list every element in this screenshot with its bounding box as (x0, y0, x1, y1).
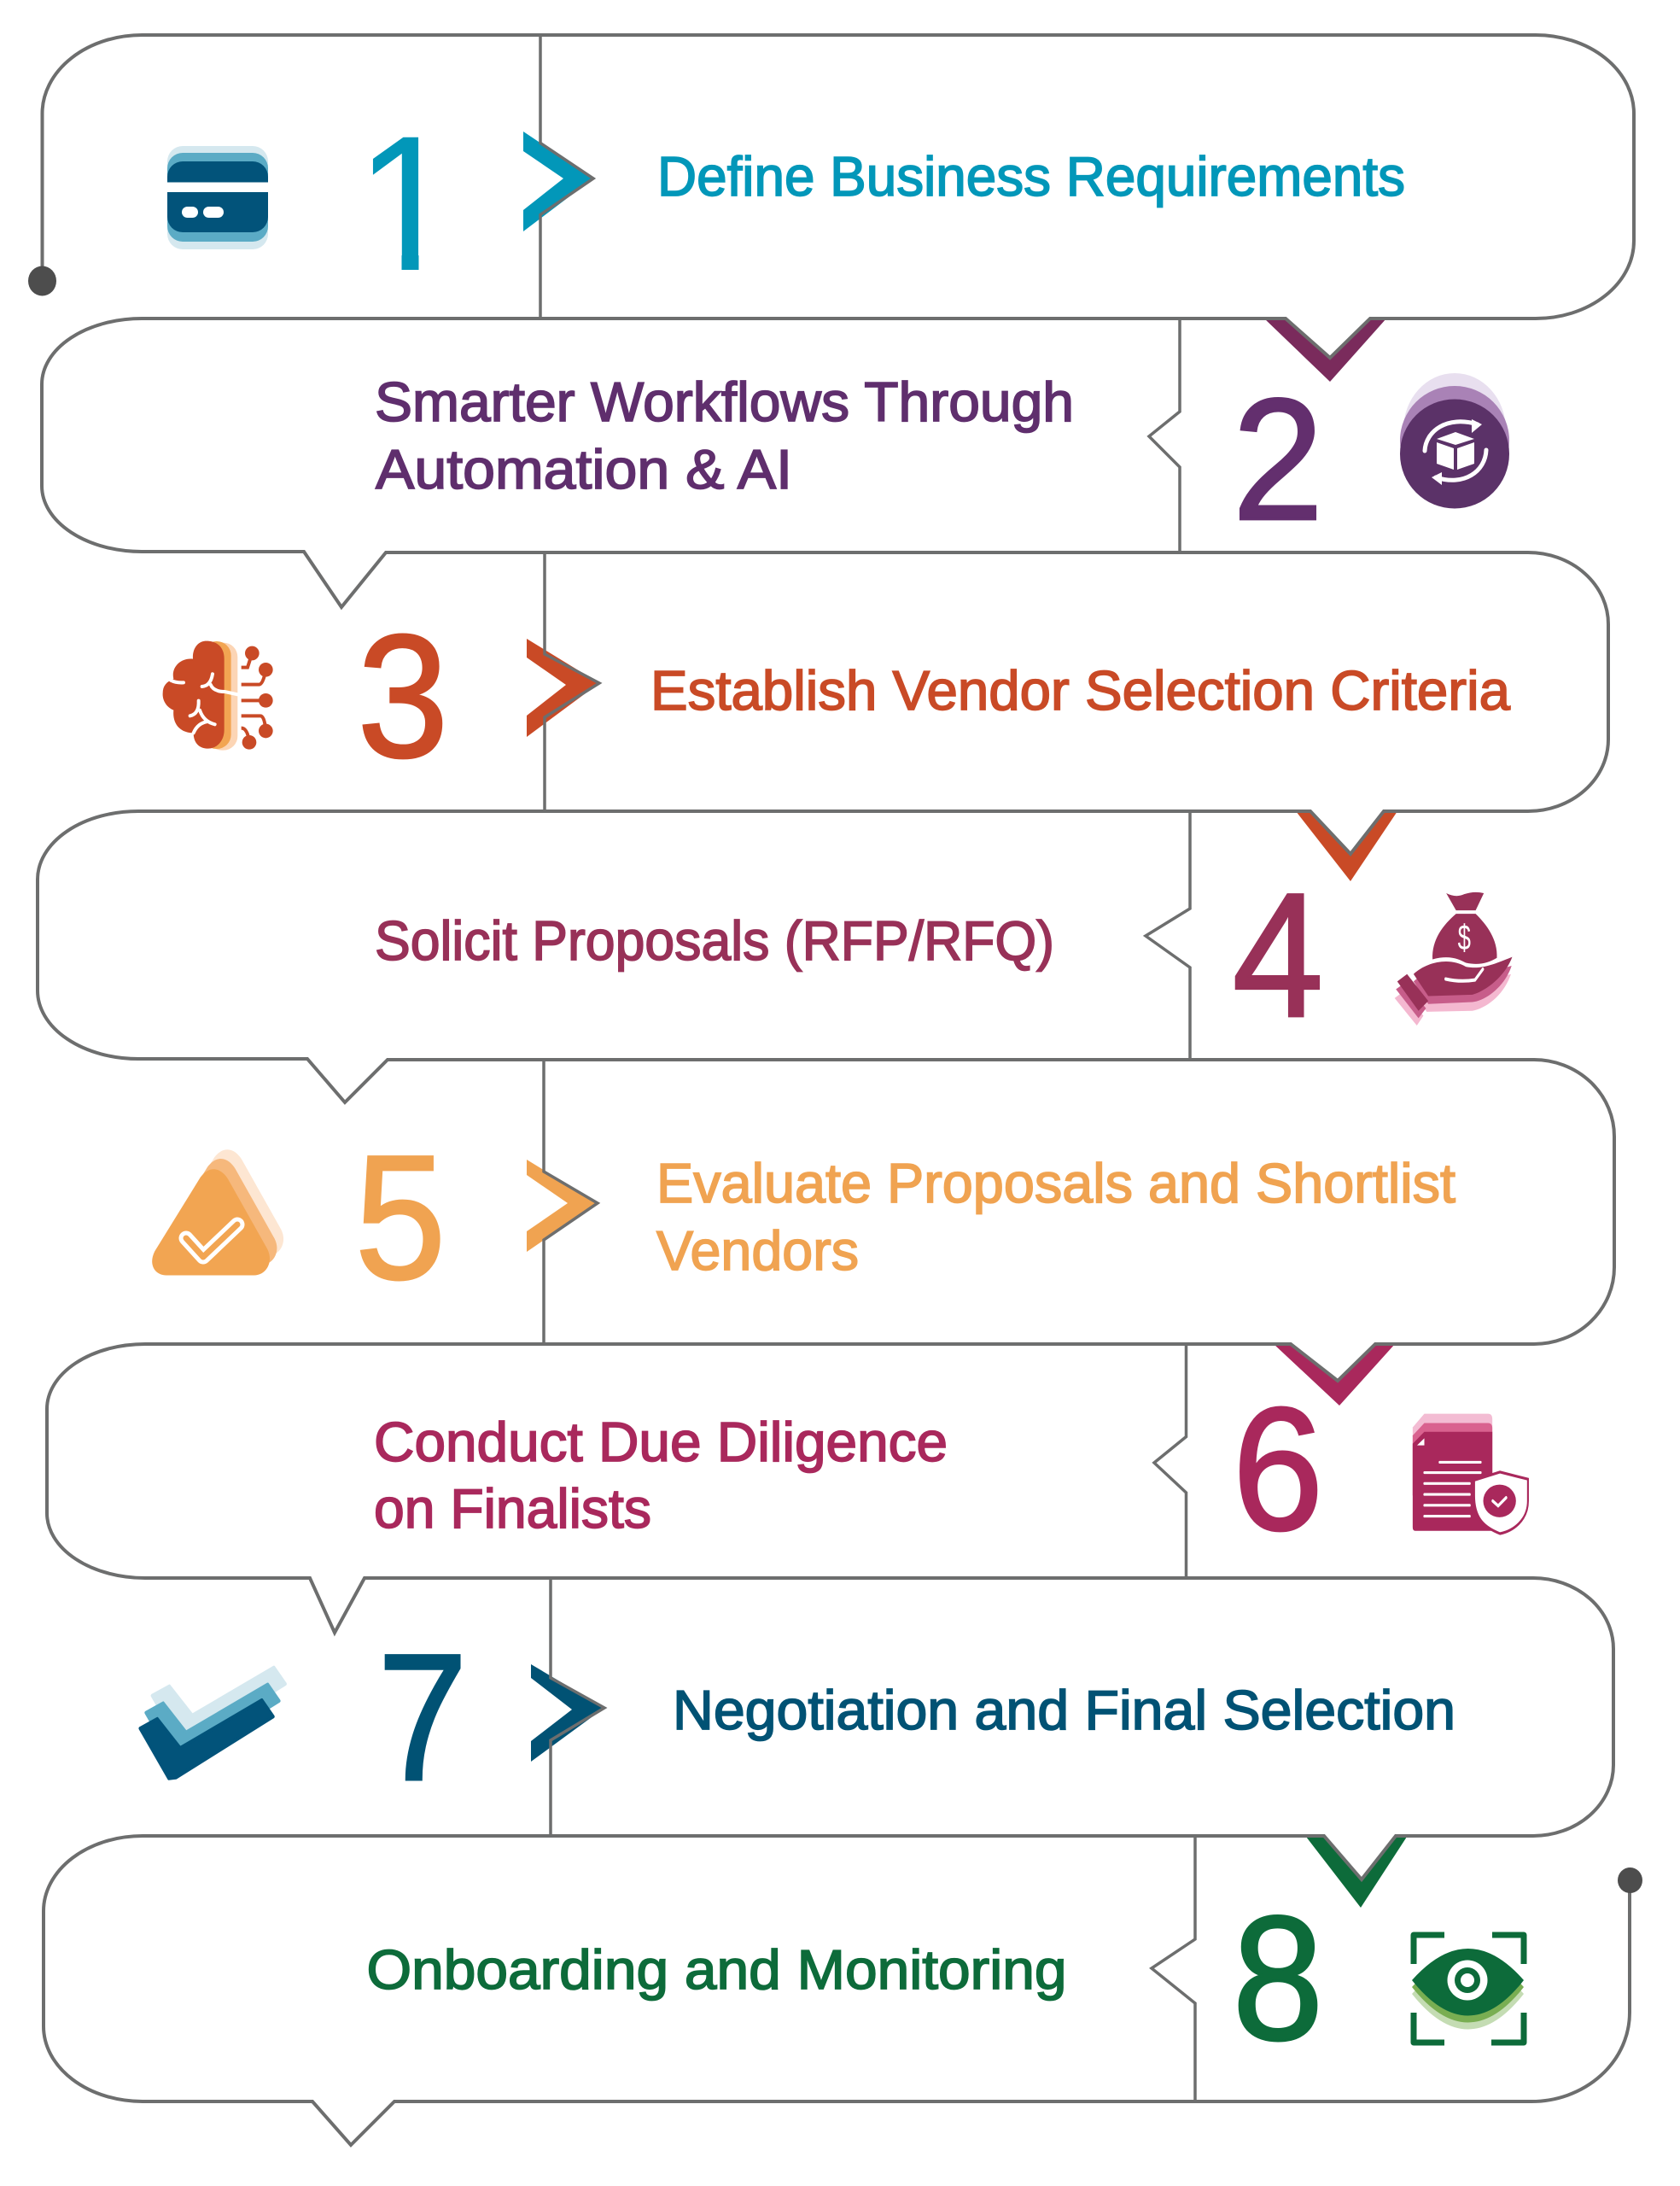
divider 8 (1152, 1836, 1195, 2101)
number 6: 6 (1233, 1371, 1323, 1567)
panel: step 2 (375, 319, 1509, 556)
heading 2: Smarter Workflows Through (375, 371, 1074, 433)
panel: step 7 (140, 1578, 1455, 1836)
heading 7: Negotiation and Final Selection (673, 1679, 1455, 1741)
icon: money bag in hand: $ (1458, 919, 1471, 957)
number 5: 5 (355, 1119, 446, 1317)
divider 1 (540, 35, 593, 319)
chevron 5 (527, 1160, 598, 1252)
start dot (28, 266, 56, 295)
heading 5: Evaluate Proposals and Shortlist (656, 1152, 1455, 1214)
number 7: 7 (377, 1616, 468, 1818)
number 3: 3 (358, 599, 448, 794)
icon: money bag in hand (1395, 892, 1512, 1026)
panel: step 3 (163, 552, 1511, 811)
heading 3: Establish Vendor Selection Criteria (650, 659, 1511, 722)
chevron 3 (527, 639, 599, 737)
divider 6 (1154, 1344, 1187, 1578)
heading 8: Onboarding and Monitoring (367, 1938, 1067, 2001)
icon: triangle check (152, 1149, 283, 1275)
chevron 2 (1264, 319, 1386, 382)
chevron 8 (1306, 1837, 1407, 1908)
panel: step 6 (374, 1344, 1528, 1578)
chevron 4 (1296, 811, 1397, 881)
number 8: 8 (1233, 1879, 1323, 2078)
panel: step 5 (152, 1060, 1455, 1344)
chevron 7 (531, 1664, 604, 1762)
heading 6: Conduct Due Diligence (374, 1411, 948, 1473)
number 2: 2 (1233, 362, 1323, 556)
panel: step 4 (375, 811, 1512, 1060)
divider 7 (551, 1578, 604, 1836)
heading 6: on Finalists (374, 1477, 651, 1540)
heading 1: Define Business Requirements (657, 145, 1405, 207)
divider 4 (1146, 811, 1190, 1060)
panel: step 1 (167, 35, 1405, 319)
divider 3 (545, 552, 599, 811)
number 1: 1 (355, 96, 458, 312)
divider 5 (544, 1060, 598, 1344)
icon: credit card (167, 146, 268, 249)
icon: layered checkmark (140, 1668, 285, 1779)
heading 2: Automation & AI (376, 438, 792, 500)
chevron 1 (523, 132, 593, 231)
number 4: 4 (1233, 856, 1323, 1055)
icon: document with shield (1413, 1414, 1528, 1534)
icon: AI brain (163, 641, 273, 751)
divider 2 (1149, 319, 1180, 552)
heading 4: Solicit Proposals (RFP/RFQ) (375, 909, 1054, 972)
icon: eye scan (1412, 1935, 1524, 2043)
panel: step 8 (367, 1836, 1524, 2101)
end dot (1618, 1867, 1642, 1893)
heading 5: Vendors (656, 1219, 859, 1282)
icon: cube cycle badge (1400, 373, 1509, 509)
chevron 6 (1274, 1344, 1395, 1406)
